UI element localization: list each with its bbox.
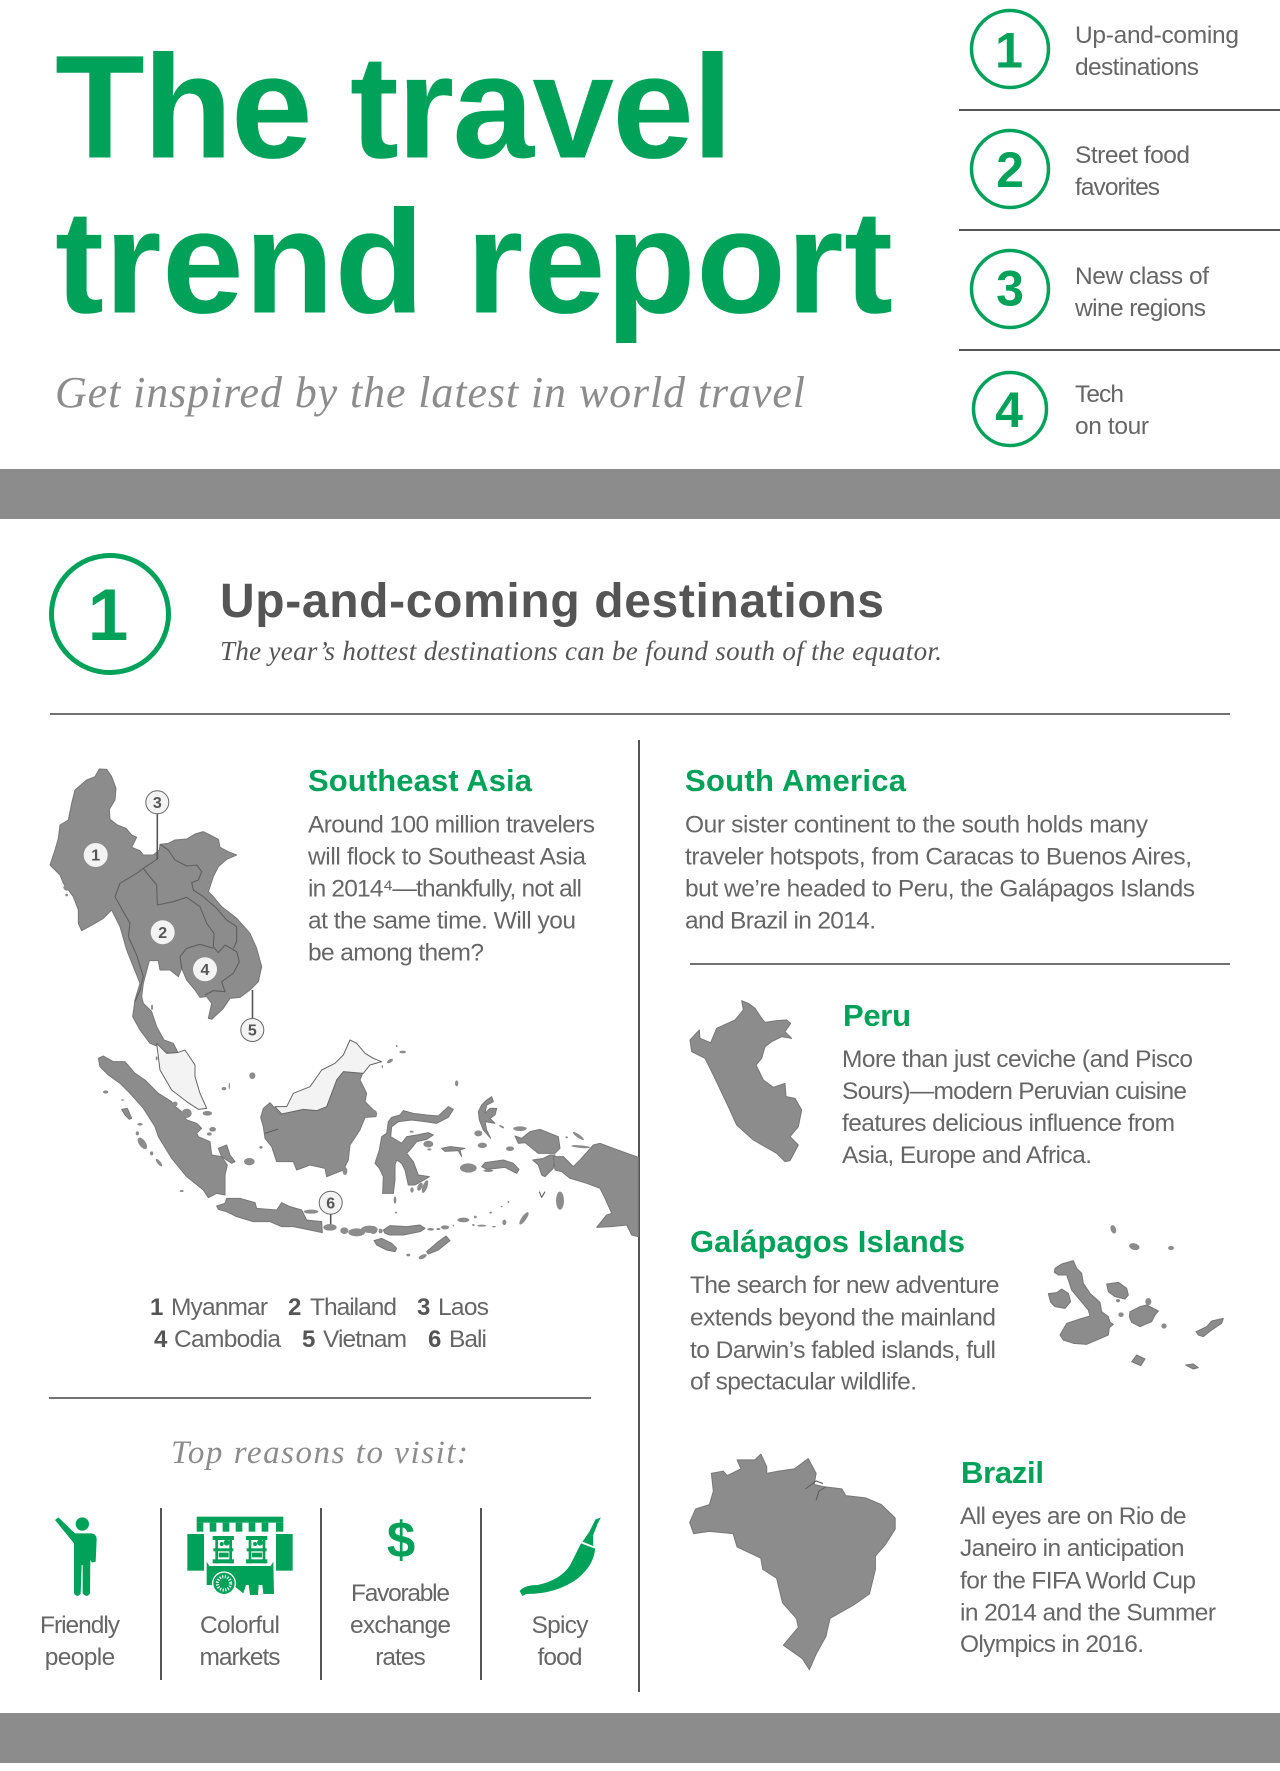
- map: Brazil: [690, 1454, 895, 1670]
- item 3: new class of wine regions: New class of: [1075, 263, 1209, 290]
- reason: favorable exchange rates: [350, 1511, 451, 1671]
- icon: dollar sign: $: [387, 1511, 415, 1568]
- panel: table of contents: [959, 10, 1280, 446]
- item 4: tech on tour: on tour: [1075, 413, 1149, 440]
- reason: spicy food: [520, 1517, 601, 1671]
- reason: spicy food: Spicy: [532, 1612, 589, 1639]
- block: Brazil: for the FIFA World Cup: [960, 1568, 1196, 1594]
- top gray band: [0, 469, 1280, 519]
- reason: favorable exchange rates: exchange: [350, 1612, 451, 1639]
- text: Southeast Asia: at the same time. Will you: [308, 908, 576, 934]
- section subheading: The year’s hottest destinations can be found south of the equator.: [220, 636, 942, 666]
- item 2: street food favorites: Street food: [1075, 142, 1190, 169]
- section number badge: 1: [88, 575, 128, 656]
- reason: friendly people: Friendly: [40, 1612, 121, 1639]
- item 2: street food favorites: favorites: [1075, 174, 1160, 201]
- block: Brazil: [960, 1455, 1216, 1658]
- map pin 4: 4: [201, 962, 210, 979]
- map pin 5: [241, 990, 264, 1042]
- title: [55, 26, 893, 344]
- icon: waving person: [55, 1517, 97, 1596]
- reason: colorful markets: Colorful: [200, 1612, 280, 1639]
- map pin 6: [319, 1191, 342, 1224]
- legend: country key: 5: [302, 1326, 315, 1353]
- map pin 3: 3: [153, 795, 162, 812]
- legend: country key: Laos: [438, 1294, 489, 1321]
- block: Brazil: Olympics in 2016.: [960, 1631, 1144, 1658]
- text: Southeast Asia: [307, 812, 595, 966]
- block: Brazil: Janeiro in anticipation: [960, 1535, 1184, 1562]
- heading: Southeast Asia: Southeast Asia: [308, 763, 533, 798]
- heading: top reasons to visit: Top reasons to visit:: [171, 1435, 468, 1471]
- reason: spicy food: food: [538, 1644, 582, 1671]
- item 4: tech on tour: [974, 372, 1149, 446]
- item 2: street food favorites: 2: [996, 142, 1024, 198]
- block: Galápagos Islands: [690, 1224, 1000, 1396]
- reason: colorful markets: [187, 1517, 293, 1671]
- block: Galápagos Islands: Galápagos Islands: [690, 1224, 965, 1259]
- item 1: up-and-coming destinations: [972, 10, 1239, 88]
- heading: South America: South America: [685, 763, 907, 798]
- legend: country key: [150, 1294, 489, 1353]
- block: Peru: Sours)—modern Peruvian cuisine: [842, 1078, 1187, 1105]
- legend: country key: 4: [154, 1326, 168, 1353]
- legend: country key: Myanmar: [171, 1294, 268, 1321]
- item 4: tech on tour: Tech: [1075, 381, 1124, 408]
- text: Southeast Asia: in 2014⁴—thankfully, not all: [308, 876, 582, 902]
- text: Southeast Asia: be among them?: [308, 940, 484, 966]
- legend: country key: Cambodia: [174, 1326, 281, 1353]
- legend: country key: 3: [417, 1294, 430, 1321]
- map pin 6: 6: [326, 1196, 335, 1212]
- block: Brazil: in 2014 and the Summer: [960, 1600, 1216, 1626]
- item 3: new class of wine regions: [972, 250, 1209, 328]
- map: Peru: [690, 1001, 802, 1162]
- map pin 4: [193, 957, 217, 981]
- block: Peru: Peru: [843, 998, 911, 1033]
- reason: colorful markets: markets: [200, 1644, 280, 1671]
- block: Peru: Asia, Europe and Africa.: [842, 1142, 1092, 1169]
- map: Galápagos Islands: [1048, 1224, 1223, 1369]
- text: Southeast Asia: Around 100 million travelers: [308, 812, 595, 838]
- block: Galápagos Islands: of spectacular wildlife.: [690, 1368, 917, 1396]
- block: Galápagos Islands: The search for new adventure: [690, 1272, 1000, 1299]
- text: South America: Our sister continent to the south holds many: [685, 812, 1149, 838]
- text: South America: but we’re headed to Peru, the Galápagos Islands: [685, 876, 1195, 902]
- block: Brazil: All eyes are on Rio de: [960, 1503, 1186, 1530]
- bottom gray band: [0, 1713, 1280, 1763]
- item 3: new class of wine regions: wine regions: [1074, 295, 1206, 322]
- block: Galápagos Islands: extends beyond the mainland: [690, 1304, 996, 1332]
- block: Galápagos Islands: to Darwin’s fabled islands, full: [690, 1337, 996, 1364]
- item 3: new class of wine regions: 3: [996, 260, 1024, 316]
- map pin 2: [151, 920, 175, 944]
- icon: market stall: [187, 1517, 293, 1595]
- text: South America: [685, 812, 1195, 934]
- item 1: up-and-coming destinations: 1: [995, 22, 1023, 78]
- reason: favorable exchange rates: rates: [375, 1644, 426, 1671]
- item 2: street food favorites: [972, 130, 1190, 208]
- legend: country key: Bali: [449, 1326, 487, 1353]
- section number badge: [52, 556, 168, 672]
- title: trend report: [55, 180, 893, 344]
- block: Peru: features delicious influence from: [842, 1110, 1175, 1137]
- reason: friendly people: [40, 1517, 121, 1671]
- legend: country key: 1: [150, 1294, 163, 1321]
- map pin 3: [146, 791, 169, 859]
- map: Southeast Asia: [40, 760, 638, 1260]
- block: Brazil: Brazil: [961, 1455, 1044, 1490]
- text: South America: traveler hotspots, from Caracas to Buenos Aires,: [685, 844, 1192, 870]
- reason: friendly people: people: [45, 1644, 115, 1671]
- subtitle: Get inspired by the latest in world travel: [55, 368, 805, 417]
- block: Peru: [842, 998, 1193, 1169]
- icon: chili pepper: [520, 1517, 601, 1596]
- map pin 2: 2: [158, 925, 167, 942]
- title: The travel: [55, 26, 733, 190]
- map pin 1: [84, 843, 108, 867]
- item 1: up-and-coming destinations: destinations: [1075, 54, 1199, 81]
- reason: favorable exchange rates: Favorable: [351, 1580, 450, 1607]
- section heading: Up-and-coming destinations: [220, 575, 884, 628]
- legend: country key: Vietnam: [323, 1326, 407, 1353]
- block: Peru: More than just ceviche (and Pisco: [842, 1046, 1193, 1073]
- item 4: tech on tour: 4: [995, 382, 1023, 438]
- text: South America: and Brazil in 2014.: [685, 908, 876, 934]
- map pin 5: 5: [248, 1022, 257, 1040]
- item 1: up-and-coming destinations: Up-and-coming: [1075, 22, 1239, 49]
- text: Southeast Asia: will flock to Southeast Asia: [307, 844, 586, 870]
- legend: country key: Thailand: [310, 1294, 397, 1321]
- map pin 1: 1: [91, 848, 100, 864]
- legend: country key: 2: [288, 1294, 301, 1321]
- legend: country key: 6: [428, 1326, 441, 1353]
